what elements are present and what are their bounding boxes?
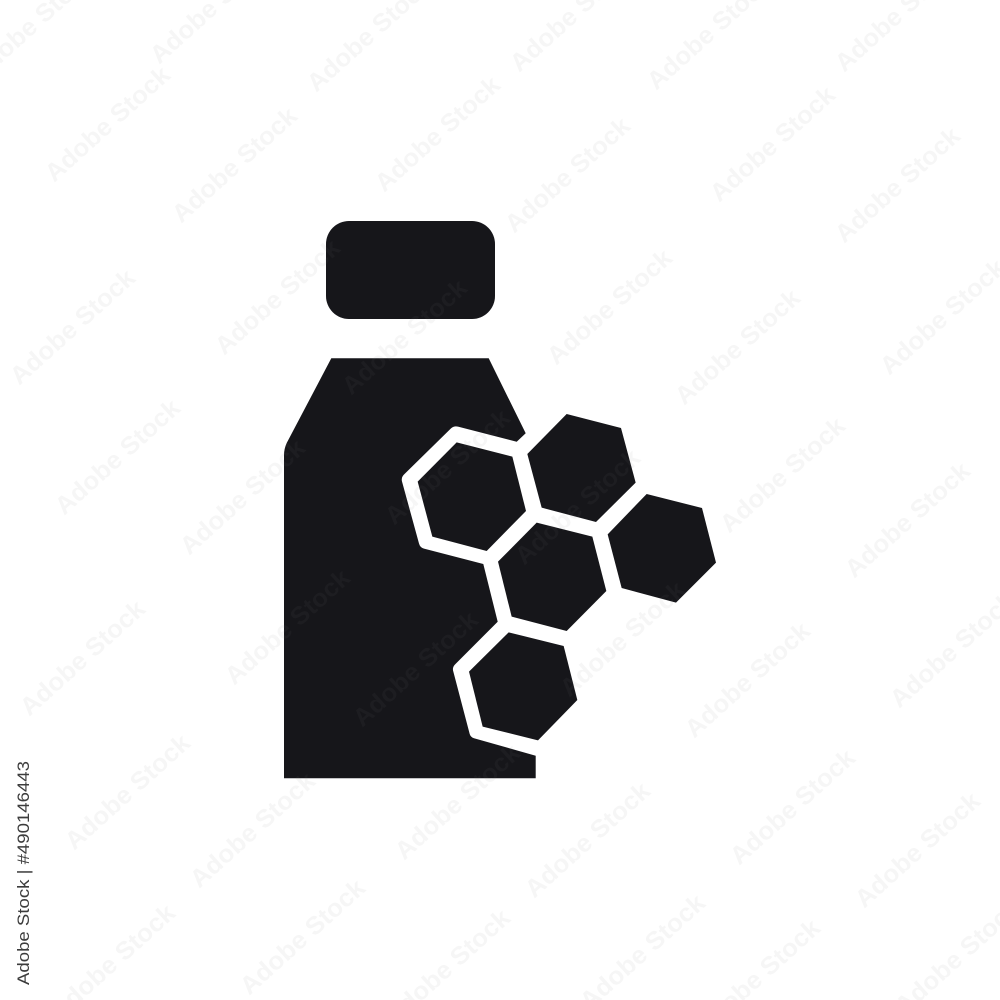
watermark pattern: Adobe Stock (175, 434, 311, 560)
watermark pattern: Adobe Stock (510, 444, 646, 570)
watermark pattern: Adobe Stock (390, 739, 526, 865)
icon: honey bottle with honeycomb (284, 221, 716, 778)
watermark pattern: Adobe Stock (500, 112, 636, 238)
watermark pattern: Adobe Stock (830, 122, 966, 248)
watermark pattern: Adobe Stock (380, 404, 516, 530)
hexagon cell 3 (498, 523, 606, 631)
watermark pattern: Adobe Stock (348, 606, 484, 732)
watermark pattern: Adobe Stock (715, 412, 851, 538)
bottle body (284, 358, 536, 778)
watermark pattern: Adobe Stock (680, 617, 816, 743)
watermark pattern: Adobe Stock (235, 874, 371, 1000)
watermark pattern: Adobe Stock (210, 234, 346, 360)
hexagon cell 4 (608, 494, 716, 603)
watermark pattern: Adobe Stock (5, 264, 141, 390)
watermark pattern: Adobe Stock (167, 102, 303, 228)
watermark pattern: Adobe Stock (60, 729, 196, 855)
watermark pattern: Adobe Stock (840, 457, 976, 583)
watermark pattern: Adobe Stock (185, 767, 321, 893)
watermark pattern: Adobe Stock (15, 595, 151, 721)
watermark pattern: Adobe Stock (337, 274, 473, 400)
watermark pattern: Adobe Stock (40, 61, 176, 187)
stock id caption: Adobe Stock | #490146443 (14, 761, 33, 985)
watermark pattern: Adobe Stock (542, 244, 678, 370)
watermark pattern: Adobe Stock (220, 564, 356, 690)
watermark pattern: Adobe Stock (555, 576, 691, 702)
hexagon cell 5 (469, 632, 577, 740)
honeycomb cells (418, 414, 716, 740)
watermark pattern: Adobe Stock (705, 81, 841, 207)
hexagon cell 1 (418, 442, 526, 551)
watermark pattern: Adobe Stock (725, 744, 861, 870)
watermark pattern: Adobe Stock (520, 777, 656, 903)
watermark pattern: Adobe Stock (370, 71, 506, 197)
watermark pattern: Adobe Stock (850, 787, 986, 913)
bottle cap (326, 221, 495, 319)
watermark pattern: Adobe Stock (50, 394, 186, 520)
watermark pattern: Adobe Stock (670, 284, 806, 410)
hexagon cell 2 (527, 414, 636, 522)
